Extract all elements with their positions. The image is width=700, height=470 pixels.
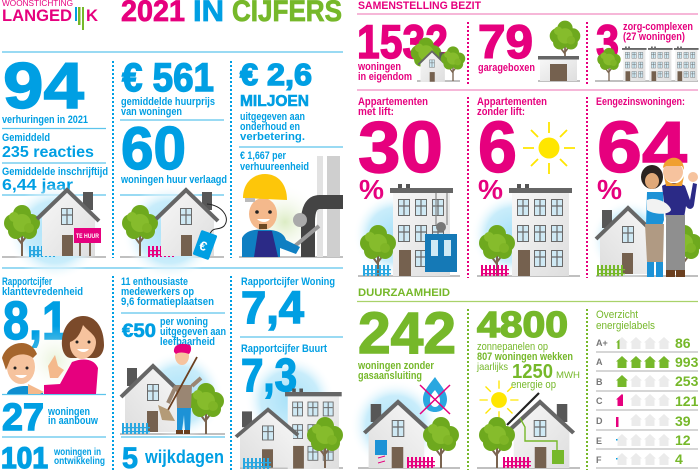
panel: appartementen zonder lift: zonder lift: [477,106,525,118]
stat: rapportcijfer buurt [241,343,335,445]
stat: 1532 woningen: 1532 [357,15,448,68]
panel: appartementen met lift [353,96,457,277]
row: A+ [596,337,690,349]
panel: appartementen zonder lift: 6 [478,108,517,188]
text: medewerkers: medewerkers op [121,286,194,298]
panel: 4800 zonnepanelen: zonnepanelen op [477,341,548,353]
illustration: three care complexes [597,46,699,81]
panel: overzicht energielabels [596,309,699,468]
heading: duurzaamheid: DUURZAAMHEID [358,287,450,299]
icon: crossed out gas flame [420,377,450,414]
stat: 3 zorg-complexen: (27 woningen) [623,31,685,43]
stat: 235 reacties: Gemiddeld [2,132,50,144]
stat: 6,44 jaar [2,166,108,194]
stat: rapportcijfer klanttevredenheid: klanttevredenheid [2,286,83,298]
stat: rapportcijfer woning [241,276,335,333]
stat: 27 woningen in aanbouw: 27 [2,397,44,439]
stat: € 50 leefbaarheid: per woning [160,316,208,328]
stat: € 50 leefbaarheid [122,316,226,348]
stat: 1532 woningen [357,15,448,83]
stat: 27 woningen in aanbouw: in aanbouw [48,415,98,427]
panel: 4800 zonnepanelen: 807 woningen wekken [477,351,573,363]
row: F [596,451,683,467]
row: F: F [596,455,602,465]
stat: 5 wijkdagen: wijkdagen [144,447,224,467]
stat: 101 woningen in ontwikkeling: ontwikkeling [54,455,105,467]
row: A [596,354,699,370]
panel: 242 woningen zonder gasaansluiting: gasaansluiting [358,370,422,382]
panel: appartementen met lift: Appartementen [358,96,428,108]
panel: 242 woningen zonder gasaansluiting: woningen zonder [357,360,435,372]
panel: overzicht energielabels: energielabels [596,320,655,332]
stat: 94 verhuringen: 94 [3,49,84,122]
stat: 60 woningen [120,115,227,186]
illustration: garage with tree [538,21,580,81]
stat: € 50 leefbaarheid: uitgegeven aan [160,326,226,338]
panel: eengezinswoningen: 64 [597,108,687,188]
stat: 101 woningen in ontwikkeling: woningen in [53,446,101,458]
stat: rapportcijfer buurt: 7,3 [241,349,297,401]
text: € 1,667 per verhuureenheid: € 1,667 per [240,150,287,162]
text: € 1,667 per verhuureenheid: verhuureenheid [240,161,309,173]
logo [2,0,99,30]
panel: overzicht energielabels: Overzicht [596,309,638,321]
panel: appartementen met lift: met lift: [358,106,394,118]
stat: 3 zorg-complexen [596,15,693,68]
panel: appartementen met lift: % [359,174,384,205]
stat: € 2,6 miljoen: onderhoud en [240,121,300,133]
illustration: boy and mother with thumb up [2,316,104,394]
panel: 4800 zonnepanelen: 4800 [477,304,568,345]
stat: 3 zorg-complexen: 3 [596,15,619,68]
row: E [596,432,691,448]
text: medewerkers: 11 enthousiaste [121,276,188,288]
illustration: sun, solar house and tree [479,380,574,468]
illustration: house, person with broom, tree [121,344,224,439]
row: E: E [596,436,602,446]
panel: appartementen met lift: 30 [358,108,443,188]
row: A+: 86 [675,335,691,351]
panel: 4800 zonnepanelen: MWH [556,370,580,380]
illustration: house te huur: TE HUUR [76,233,99,240]
stat: 6,44 jaar: 6,44 jaar [2,177,73,194]
panel: appartementen zonder lift: Appartementen [477,96,547,108]
text: € 1,667 per verhuureenheid [240,150,309,173]
text: medewerkers [121,276,214,308]
row: F: 4 [675,451,683,467]
row: E: 12 [675,432,691,448]
stat: rapportcijfer woning: Rapportcijfer Woning [241,276,335,288]
row: B: 253 [675,373,699,389]
panel: 4800 zonnepanelen: 1250 [512,361,553,383]
row: B: B [596,377,603,387]
logo: LANGED [2,6,72,25]
stat: € 2,6 miljoen: € 2,6 [240,57,312,92]
logo: K [86,6,99,25]
panel: 242 woningen zonder gasaansluiting [350,301,459,470]
illustration: house te huur [4,184,103,280]
illustration: family [641,158,698,277]
illustration: plumber with pipes [242,156,343,260]
panel: 242 woningen zonder gasaansluiting: 242 [358,301,456,366]
stat: € 561: van woningen [121,106,182,118]
title [121,0,342,28]
stat: 101 woningen in ontwikkeling [1,442,105,470]
row: C: 121 [675,393,699,409]
stat: rapportcijfer buurt: Rapportcijfer Buurt [241,343,327,355]
stat: € 2,6 miljoen: uitgegeven aan [240,111,305,123]
heading: samenstelling bezit: SAMENSTELLING BEZIT [358,0,481,12]
row: C: C [596,396,603,406]
stat: 94 verhuringen: verhuringen in 2021 [2,114,88,126]
row: A: 993 [675,354,699,370]
row: A: A [596,357,603,367]
panel: 4800 zonnepanelen [476,304,580,468]
stat: 27 woningen in aanbouw: woningen [47,406,90,418]
panel: appartementen zonder lift: % [478,174,503,205]
stat: € 2,6 miljoen: verbetering. [240,131,305,143]
stat: € 561 [121,56,215,118]
illustration: house and apartment building [236,389,343,469]
row: D: 39 [675,413,691,429]
illustration: small house with trees [411,38,465,82]
stat: 79 garageboxen: garageboxen [478,62,535,74]
stat: € 561: € 561 [122,56,214,100]
panel: eengezinswoningen [590,96,700,280]
row: C [596,394,698,406]
panel: eengezinswoningen: % [597,174,622,205]
row: D [596,413,691,429]
panel: 4800 zonnepanelen: energie op [511,379,556,391]
stat: 1532 woningen: in eigendom [358,71,412,83]
stat: rapportcijfer woning: 7,4 [241,282,304,333]
stat: 235 reacties [2,132,94,161]
stat: 235 reacties: 235 reacties [2,144,94,161]
panel: appartementen zonder lift [471,96,575,277]
stat: € 2,6 miljoen [240,57,312,143]
stat: 6,44 jaar: Gemiddelde inschrijftijd [2,166,108,178]
text: medewerkers: 9,6 formatieplaatsen [121,296,214,308]
stat: 5 wijkdagen [122,442,224,470]
row: A+: A+ [596,338,608,348]
row: D: D [596,416,603,426]
stat: rapportcijfer klanttevredenheid: Rapportcijfer [2,276,53,288]
stat: 79 garageboxen: 79 [478,15,533,68]
stat: € 50 leefbaarheid: €50 [122,321,156,342]
illustration: house with euro tag: € [197,238,209,254]
illustration: house with euro tag [122,184,226,280]
stat: rapportcijfer klanttevredenheid: 8,1 [3,291,68,351]
stat: € 2,6 miljoen: MILJOEN [240,93,309,110]
stat: € 561: gemiddelde huurprijs [121,96,215,108]
stat: 60 woningen: 60 [121,115,186,182]
row: B [596,373,699,389]
stat: € 50 leefbaarheid: leefbaarheid [160,336,215,348]
stat: 60 woningen: woningen huur verlaagd [120,174,227,186]
stat: 27 woningen in aanbouw [2,397,98,439]
panel: 4800 zonnepanelen: jaarlijks [476,361,508,373]
stat: 1532 woningen: woningen [357,61,401,73]
